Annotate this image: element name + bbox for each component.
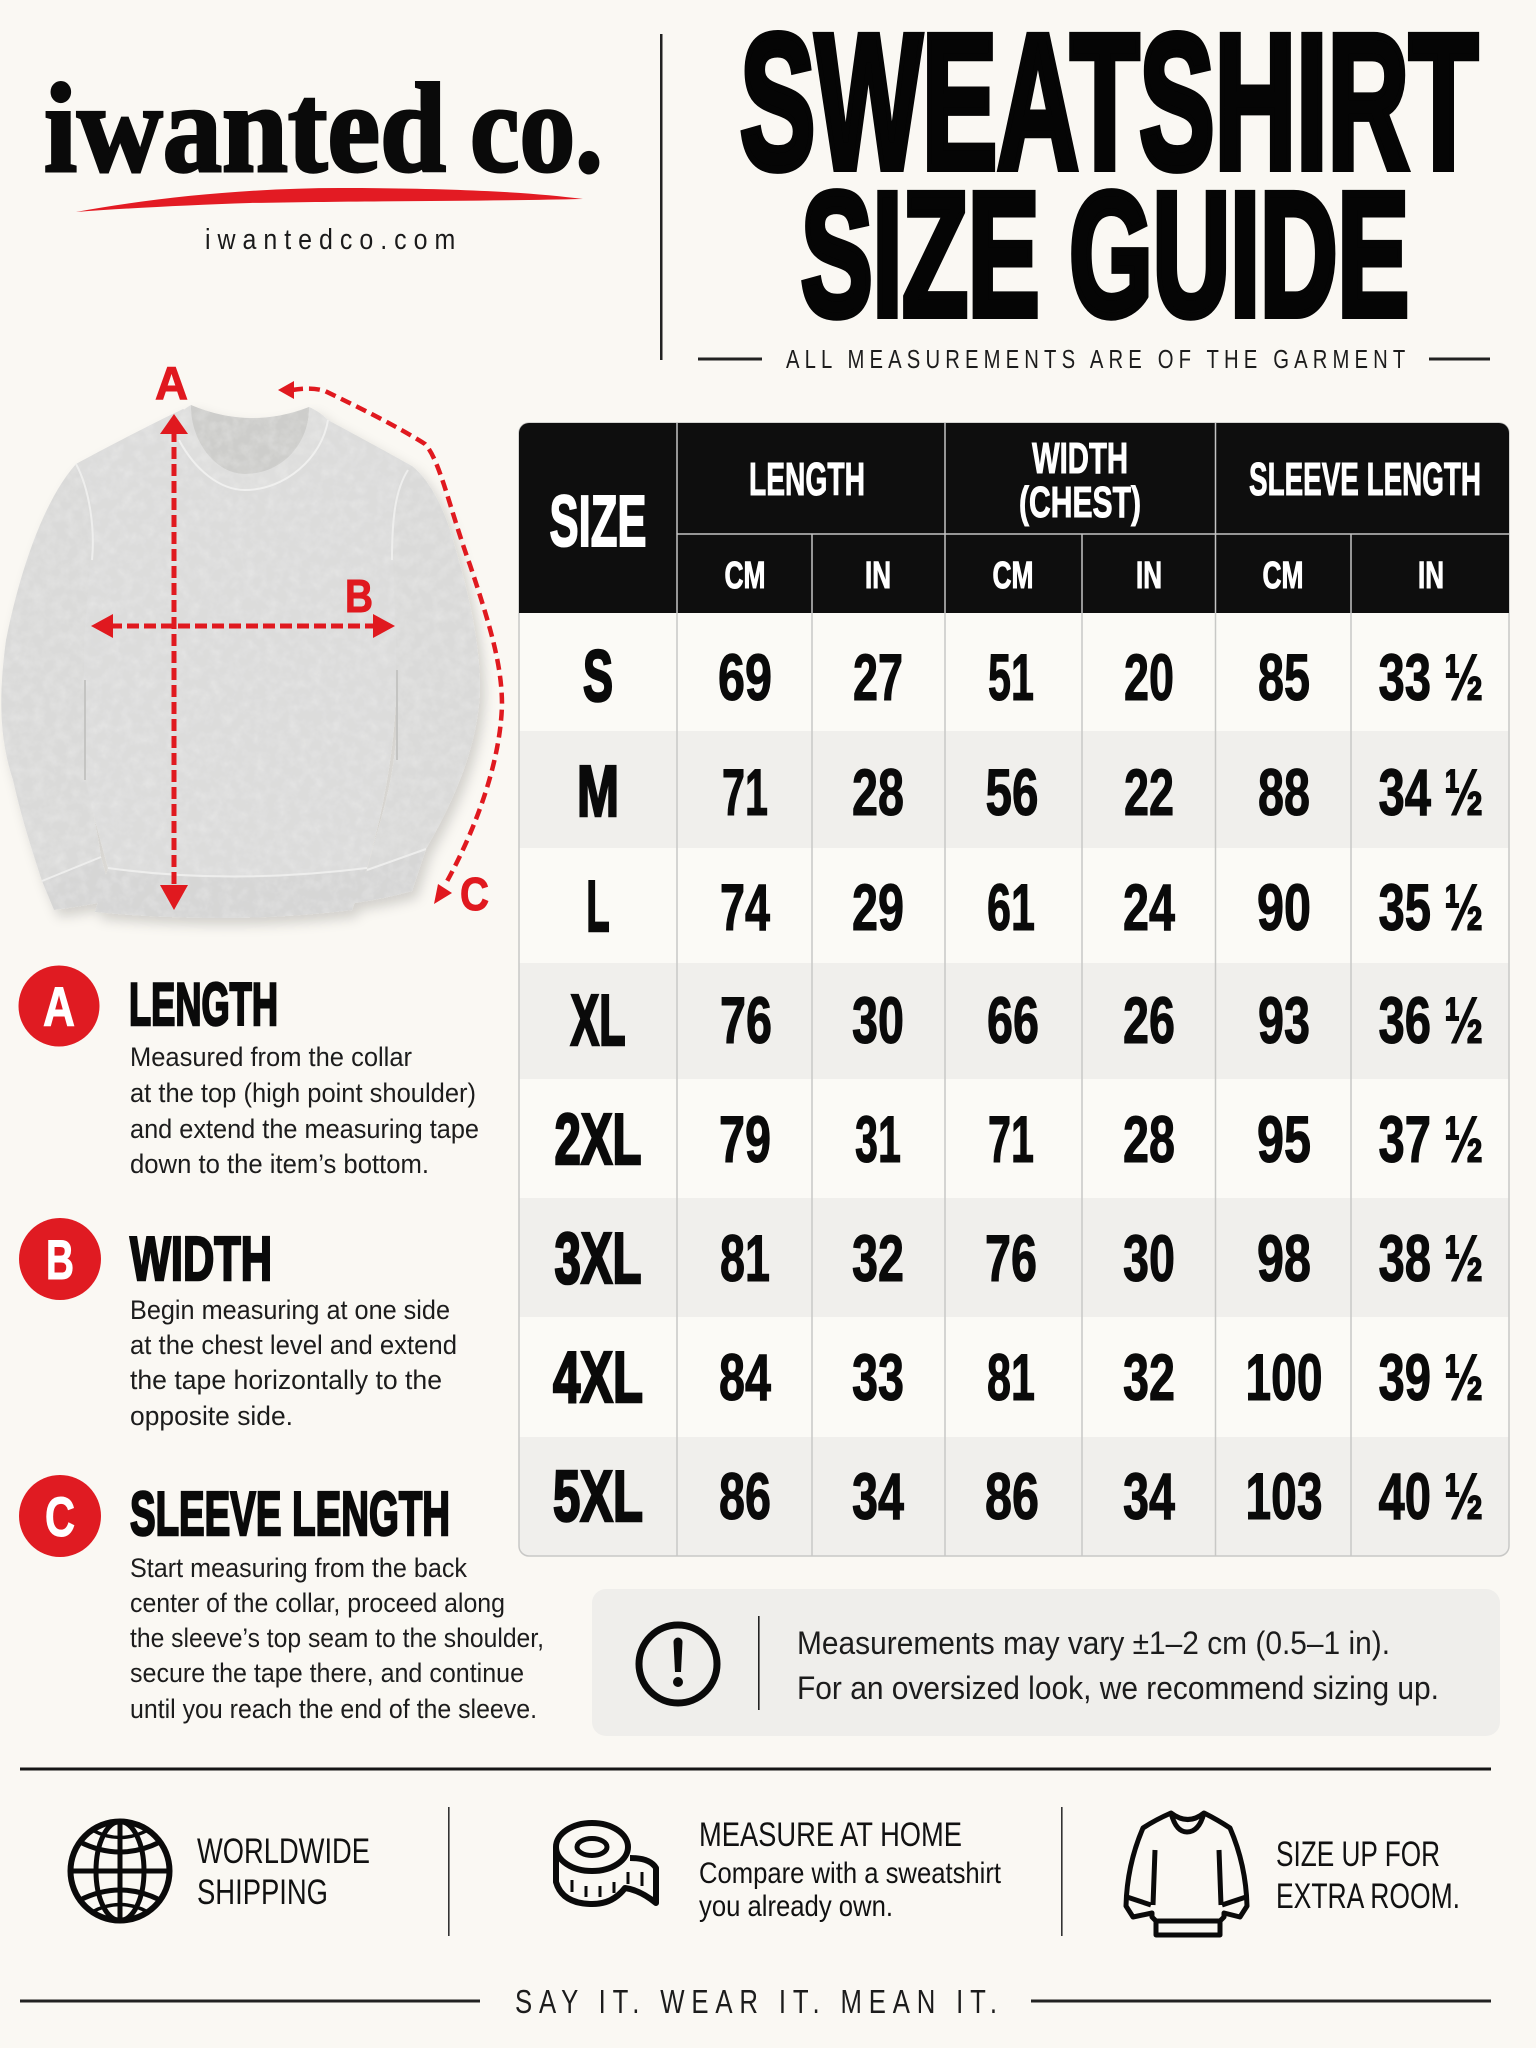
- row XL: 76: [720, 983, 772, 1057]
- measure text: Compare with a sweatshirt: [699, 1857, 1002, 1890]
- row S: 20: [1124, 640, 1174, 714]
- row XL: [570, 981, 1484, 1061]
- row 2XL: [554, 1100, 1484, 1180]
- row L: 35 ½: [1378, 870, 1484, 944]
- row 5XL: 34: [1123, 1459, 1175, 1533]
- row S: 85: [1258, 640, 1310, 714]
- row 4XL: 39 ½: [1378, 1340, 1484, 1414]
- row 3XL: 3XL: [554, 1219, 642, 1299]
- table header: CM: [1262, 555, 1304, 597]
- table header: CM: [724, 555, 766, 597]
- table body background: [519, 613, 1509, 1556]
- sleeve length text: center of the collar, proceed along: [130, 1588, 505, 1618]
- footer: worldwide shipping: [70, 1821, 370, 1921]
- width text: the tape horizontally to the: [130, 1365, 442, 1395]
- row M: 28: [852, 755, 904, 829]
- shipping text: SHIPPING: [197, 1873, 328, 1912]
- row 3XL: 81: [720, 1221, 770, 1295]
- arrow A: length: A: [155, 357, 188, 409]
- length text: [130, 1042, 479, 1179]
- row L: 29: [852, 870, 904, 944]
- row L: 24: [1123, 870, 1175, 944]
- tagline: SAY IT. WEAR IT. MEAN IT.: [515, 1984, 997, 2021]
- row 5XL: 86: [719, 1459, 771, 1533]
- icon: measuring tape: [556, 1823, 656, 1904]
- row 3XL: 38 ½: [1378, 1221, 1484, 1295]
- row XL: 26: [1123, 983, 1175, 1057]
- icon: sweatshirt outline: [1126, 1813, 1247, 1935]
- badge B: B: [46, 1228, 74, 1291]
- table header: SIZE: [550, 482, 646, 562]
- row 3XL: 76: [985, 1221, 1037, 1295]
- measure text: [699, 1816, 1002, 1923]
- measure text: you already own.: [699, 1890, 893, 1923]
- row XL: XL: [570, 981, 626, 1061]
- table header: IN: [1418, 555, 1444, 597]
- sleeve length text: secure the tape there, and continue: [130, 1658, 524, 1688]
- subtitle: ALL MEASUREMENTS ARE OF THE GARMENT: [786, 345, 1405, 374]
- size up text: SIZE UP FOR: [1276, 1835, 1440, 1874]
- arrow C: sleeve length: C: [460, 868, 489, 920]
- row 4XL: 32: [1123, 1340, 1175, 1414]
- row 5XL: 86: [985, 1459, 1039, 1533]
- row 2XL: 79: [719, 1102, 771, 1176]
- length text: at the top (high point shoulder): [130, 1078, 476, 1108]
- row L: L: [586, 867, 610, 947]
- length text: down to the item’s bottom.: [130, 1149, 429, 1179]
- logo wordmark: iwanted: [44, 59, 446, 199]
- icon: exclamation: [639, 1625, 717, 1703]
- table header: CM: [992, 555, 1034, 597]
- table: [519, 423, 1509, 1556]
- row 3XL: 30: [1123, 1221, 1175, 1295]
- table header: LENGTH: [749, 453, 865, 505]
- row XL: 36 ½: [1378, 983, 1484, 1057]
- row M: [577, 752, 1484, 832]
- row 3XL: [554, 1219, 1484, 1299]
- badge A: A: [43, 975, 75, 1038]
- logo: [44, 59, 603, 255]
- shipping text: WORLDWIDE: [197, 1832, 370, 1871]
- row M: 71: [722, 755, 768, 829]
- tagline: [20, 1984, 1491, 2021]
- length text: Measured from the collar: [130, 1042, 412, 1072]
- row 3XL: 98: [1257, 1221, 1311, 1295]
- row L: 61: [987, 870, 1035, 944]
- row 4XL: 100: [1246, 1340, 1322, 1414]
- width text: [130, 1295, 457, 1431]
- row 2XL: 95: [1257, 1102, 1311, 1176]
- row 2XL: 71: [988, 1102, 1034, 1176]
- badge C: [19, 1475, 101, 1557]
- arrow A: length: [155, 357, 188, 910]
- row 3XL: 32: [852, 1221, 904, 1295]
- row M: 88: [1258, 755, 1310, 829]
- table header: (CHEST): [1019, 478, 1141, 527]
- row L: 90: [1257, 870, 1311, 944]
- width text: opposite side.: [130, 1401, 293, 1431]
- badge B: [19, 1218, 101, 1300]
- sleeve length text: the sleeve’s top seam to the shoulder,: [130, 1623, 544, 1653]
- arrow C: sleeve length: [278, 381, 502, 920]
- row XL: 66: [987, 983, 1039, 1057]
- heading length: LENGTH: [129, 971, 278, 1038]
- row 2XL: 2XL: [554, 1100, 642, 1180]
- panel: sleeve length instructions: [19, 1475, 544, 1724]
- row S: S: [583, 637, 613, 717]
- footer: size up: [1126, 1813, 1460, 1935]
- width text: at the chest level and extend: [130, 1330, 457, 1360]
- heading sleeve length: SLEEVE LENGTH: [130, 1480, 450, 1549]
- row 4XL: 33: [852, 1340, 904, 1414]
- note text: Measurements may vary ±1–2 cm (0.5–1 in).: [797, 1625, 1390, 1661]
- row 2XL: 31: [855, 1102, 901, 1176]
- row 4XL: 81: [987, 1340, 1035, 1414]
- row XL: 93: [1258, 983, 1310, 1057]
- row M: 34 ½: [1378, 755, 1484, 829]
- table header: [519, 423, 1509, 613]
- badge A: [18, 966, 100, 1046]
- row XL: 30: [852, 983, 904, 1057]
- width text: Begin measuring at one side: [130, 1295, 450, 1325]
- row 5XL: 40 ½: [1378, 1459, 1484, 1533]
- sweatshirt measurement diagram: [1, 357, 502, 920]
- row 2XL: 28: [1123, 1102, 1175, 1176]
- row M: 56: [986, 755, 1038, 829]
- row 5XL: 34: [852, 1459, 904, 1533]
- row 5XL: 103: [1246, 1459, 1322, 1533]
- callout: measurement note: [592, 1589, 1500, 1736]
- sleeve length text: until you reach the end of the sleeve.: [130, 1694, 537, 1724]
- row 5XL: 5XL: [553, 1457, 643, 1537]
- row L: [586, 867, 1484, 947]
- title: [740, 0, 1478, 353]
- row S: 69: [718, 640, 772, 714]
- table header: WIDTH: [1032, 434, 1128, 483]
- arrow B: width: B: [345, 570, 373, 622]
- size up text: EXTRA ROOM.: [1276, 1877, 1460, 1916]
- measure text: MEASURE AT HOME: [699, 1816, 962, 1854]
- panel: length instructions: [18, 966, 479, 1179]
- row 4XL: [553, 1338, 1484, 1418]
- size up text: [1276, 1835, 1460, 1916]
- red swoosh: [76, 188, 583, 212]
- note text: For an oversized look, we recommend sizing up.: [797, 1670, 1439, 1706]
- arrow B: width: [91, 570, 395, 638]
- row 4XL: 4XL: [553, 1338, 643, 1418]
- sleeve length text: [130, 1553, 544, 1724]
- icon: globe: [70, 1821, 170, 1921]
- table header: IN: [865, 555, 891, 597]
- row 5XL: [553, 1457, 1484, 1537]
- website: iwantedco.com: [205, 223, 455, 255]
- logo wordmark: co.: [470, 59, 603, 199]
- row M: 22: [1124, 755, 1174, 829]
- row S: 33 ½: [1378, 640, 1484, 714]
- row L: 74: [720, 870, 770, 944]
- heading width: WIDTH: [130, 1225, 272, 1294]
- note text: [797, 1625, 1439, 1706]
- row S: 27: [853, 640, 903, 714]
- length text: and extend the measuring tape: [130, 1114, 479, 1144]
- row S: 51: [988, 640, 1034, 714]
- sleeve length text: Start measuring from the back: [130, 1553, 467, 1583]
- sweatshirt photo: [1, 405, 480, 918]
- badge C: C: [45, 1485, 75, 1548]
- shipping text: [197, 1832, 370, 1912]
- panel: width instructions: [19, 1218, 457, 1431]
- row 4XL: 84: [719, 1340, 771, 1414]
- row S: [583, 637, 1484, 717]
- row M: M: [577, 752, 619, 832]
- footer: measure at home: [556, 1816, 1002, 1923]
- row 2XL: 37 ½: [1378, 1102, 1484, 1176]
- table header: IN: [1136, 555, 1162, 597]
